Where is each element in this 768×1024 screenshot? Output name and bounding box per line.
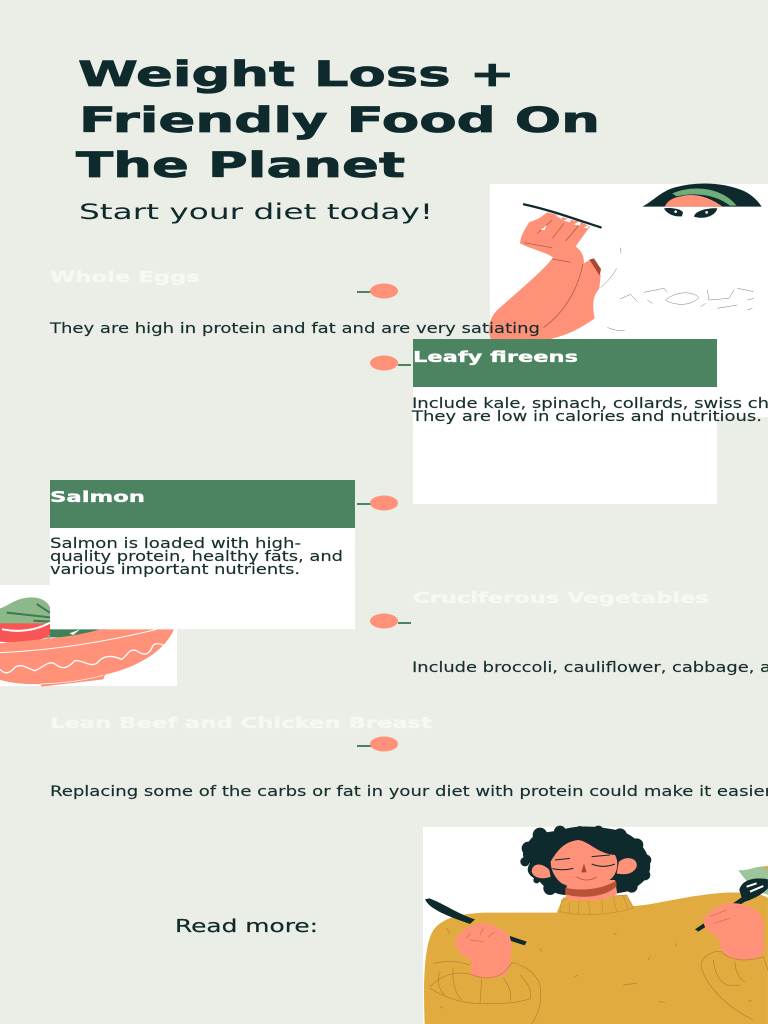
heading: Lean Beef and Chicken Breast: Lean Beef and Chicken Breast (50, 714, 433, 732)
item: Cruciferous Vegetables (370, 589, 768, 676)
marker: Whole Eggs (357, 284, 398, 298)
heading: Whole Eggs: Whole Eggs (50, 268, 200, 286)
text: Leafy Greens description (411, 396, 768, 425)
marker: Salmon (357, 496, 398, 510)
panel: Salmon (50, 480, 355, 629)
title: Friendly Food On (79, 101, 600, 141)
title: The Planet (76, 146, 405, 186)
read more link: Read more: (175, 916, 318, 937)
heading: Salmon: Salmon (50, 488, 145, 506)
text: Salmon description: various important nutrients. (50, 562, 300, 578)
text: Cruciferous Vegetables description: Include broccoli, cauliflower, cabbage, a (412, 660, 768, 676)
text: Leafy Greens description: Include kale, spinach, collards, swiss ch (412, 396, 768, 412)
subtitle: Start your diet today! (79, 200, 433, 225)
text: Lean Beef and Chicken Breast description: Replacing some of the carbs or fat in your diet with protein could make it easier (50, 784, 768, 800)
title: Weight Loss + (78, 55, 515, 95)
item: Lean Beef and Chicken Breast (50, 714, 768, 800)
item: Whole Eggs (49, 268, 540, 337)
illustration: woman with knife peeking (489, 183, 768, 417)
marker: Lean Beef and Chicken Breast (357, 736, 398, 752)
heading: Cruciferous Vegetables: Cruciferous Vegetables (413, 589, 709, 607)
text: Salmon description: Salmon is loaded with high- (50, 536, 301, 552)
title (76, 55, 600, 186)
text: Salmon description (50, 536, 343, 578)
text: Whole Eggs description: They are high in protein and fat and are very satiating (49, 321, 540, 337)
heading: Leafy Greens: Leafy fireens (413, 348, 578, 366)
text: Leafy Greens description: They are low in calories and nutritious. (411, 409, 762, 425)
illustration: woman eating with knife and fork (423, 826, 768, 1024)
marker: Leafy Greens (370, 356, 411, 370)
text: Salmon description: quality protein, healthy fats, and (50, 549, 343, 565)
illustration: salad bowl (0, 585, 177, 687)
panel: Leafy Greens (411, 339, 768, 504)
marker: Cruciferous Vegetables (370, 614, 411, 628)
